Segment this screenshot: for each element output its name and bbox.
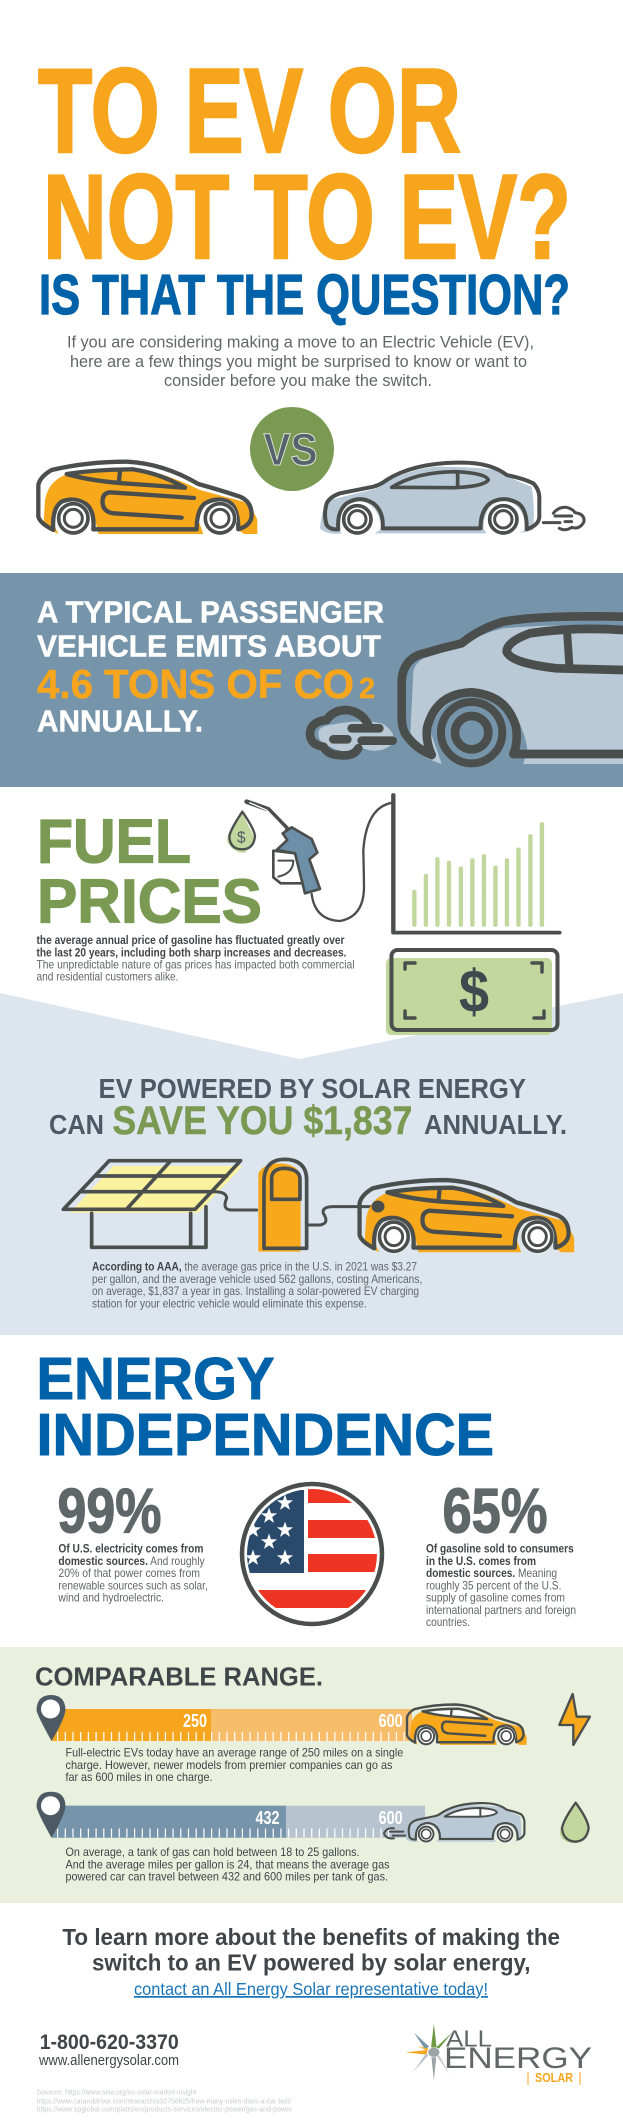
sources: Sources: https://www.seia.org/us-solar-market-insight <box>37 2089 197 2096</box>
heading: solar savings: ANNUALLY. <box>424 1109 567 1140</box>
intro text: consider before you make the switch. <box>164 372 432 390</box>
bar: electric range: 600 <box>379 1711 403 1731</box>
banner text: A TYPICAL PASSENGER <box>37 595 384 630</box>
logo: All Energy Solar: ALL <box>446 2026 492 2052</box>
heading: comparable range: COMPARABLE RANGE. <box>35 1662 323 1692</box>
contact details <box>38 2031 179 2069</box>
electric range text <box>66 1746 404 1784</box>
icon: dollar bill <box>386 950 558 1035</box>
banner text: VEHICLE EMITS ABOUT <box>37 629 381 664</box>
contact details: 1-800-620-3370 <box>40 2031 179 2054</box>
solar savings text: According to AAA, the average gas price in the U.S. in 2021 was $3.27 <box>92 1261 417 1274</box>
stat: 99 percent: wind and hydroelectric. <box>58 1592 164 1605</box>
title <box>38 44 571 327</box>
banner text <box>37 595 384 739</box>
stat: 65 percent: Of gasoline sold to consumers <box>426 1543 574 1556</box>
stat: 65 percent: supply of gasoline comes from <box>426 1592 565 1605</box>
heading: energy independence: INDEPENDENCE <box>36 1402 494 1468</box>
bar: gas range: 600 <box>379 1808 403 1828</box>
heading: solar savings <box>49 1073 567 1143</box>
solar savings text: per gallon, and the average vehicle used 562 gallons, costing Americans, <box>92 1273 422 1286</box>
heading: energy independence: ENERGY <box>36 1346 274 1412</box>
bar: electric range <box>36 1695 412 1741</box>
call to action: switch to an EV powered by solar energy, <box>92 1950 530 1976</box>
title: TO EV OR <box>38 44 461 178</box>
intro text <box>67 334 534 390</box>
icon: fuel drop <box>560 1803 589 1843</box>
heading: solar savings: CAN <box>49 1109 104 1140</box>
stat: 65 percent: countries. <box>426 1616 470 1629</box>
stat: 99 percent: Of U.S. electricity comes from <box>58 1543 203 1556</box>
fuel prices text: The unpredictable nature of gas prices has impacted both commercial <box>36 959 354 972</box>
solar savings text: station for your electric vehicle would eliminate this expense. <box>92 1297 367 1310</box>
heading: solar savings: SAVE YOU $1,837 <box>112 1099 412 1143</box>
icon: fuel nozzle, drop and hose <box>227 802 393 921</box>
bar: gas range: 432 <box>256 1808 280 1828</box>
call to action <box>62 1924 560 1999</box>
fuel prices text: the average annual price of gasoline has fluctuated greatly over <box>36 934 345 947</box>
icon: lightning bolt <box>559 1694 590 1745</box>
solar savings text: on average, $1,837 a year in gas. Installing a solar-powered EV charging <box>92 1285 419 1298</box>
stat: 65 percent <box>426 1477 576 1629</box>
panel: solar savings background <box>0 993 623 1335</box>
icon: solar panel, charger and car <box>63 1159 574 1254</box>
bar: gas range <box>36 1792 425 1838</box>
heading: fuel prices: FUEL <box>37 808 191 877</box>
stat: 99 percent: domestic sources. And roughly <box>58 1555 205 1568</box>
icon: US flag circle <box>240 1484 390 1624</box>
intro text: If you are considering making a move to an Electric Vehicle (EV), <box>67 334 534 352</box>
icon: dollar bill: $ <box>459 958 489 1025</box>
fuel prices text: the last 20 years, including both sharp increases and decreases. <box>36 947 346 960</box>
call to action: To learn more about the benefits of making the <box>62 1924 560 1950</box>
icon: electric car <box>38 462 257 535</box>
fuel prices text <box>36 934 354 984</box>
fuel prices text: and residential customers alike. <box>36 971 178 984</box>
gas range text: And the average miles per gallon is 24, that means the average gas <box>66 1857 390 1871</box>
gas range text <box>66 1845 390 1883</box>
panel: comparable range <box>0 1647 623 1903</box>
heading: energy independence <box>36 1346 494 1468</box>
stat: 99 percent: renewable sources such as solar, <box>58 1579 208 1592</box>
intro text: here are a few things you might be surprised to know or want to <box>70 353 527 371</box>
logo: All Energy Solar: ENERGY <box>444 2042 592 2075</box>
banner text: 2 <box>359 673 375 705</box>
stat: 65 percent: domestic sources. Meaning <box>426 1567 557 1580</box>
electric range text: far as 600 miles in one charge. <box>66 1770 212 1784</box>
stat: 99 percent: 20% of that power comes from <box>58 1567 200 1580</box>
banner text: ANNUALLY. <box>37 704 203 739</box>
heading: solar savings: EV POWERED BY SOLAR ENERGY <box>98 1073 526 1104</box>
logo: All Energy Solar: SOLAR <box>535 2070 574 2085</box>
VS badge: VS <box>264 424 318 475</box>
stat: 65 percent: international partners and foreign <box>426 1604 576 1617</box>
panel: CO2 banner <box>0 573 623 787</box>
logo: All Energy Solar <box>405 2024 592 2085</box>
electric range text: charge. However, newer models from premier companies can go as <box>66 1758 393 1772</box>
heading: fuel prices: PRICES <box>37 868 262 937</box>
icon: fuel nozzle, drop and hose: $ <box>237 829 246 846</box>
car charging <box>360 1180 574 1254</box>
sources: https://www.caranddriver.com/research/a32758625/how-many-miles-does-a-car-last/ <box>37 2098 291 2105</box>
VS badge <box>250 407 334 491</box>
bar: electric range: 250 <box>183 1711 207 1731</box>
stat: 99 percent: 99% <box>58 1477 162 1547</box>
icon: large gas car and exhaust <box>310 616 623 764</box>
icon: gas car small <box>406 1803 524 1843</box>
stat: 65 percent: roughly 35 percent of the U.S. <box>426 1579 561 1592</box>
gas range text: powered car can travel between 432 and 600 miles per tank of gas. <box>66 1869 388 1883</box>
gas range text: On average, a tank of gas can hold between 18 to 25 gallons. <box>66 1845 360 1859</box>
heading: fuel prices <box>37 808 262 937</box>
icon: gas car with exhaust <box>320 463 584 536</box>
electric range text: Full-electric EVs today have an average range of 250 miles on a single <box>66 1746 404 1760</box>
sources <box>37 2089 293 2114</box>
icon: electric car small <box>407 1704 527 1746</box>
banner text: 4.6 TONS OF CO <box>37 661 354 707</box>
solar savings text <box>92 1261 422 1310</box>
contact details: www.allenergysolar.com <box>38 2052 179 2069</box>
stat: 99 percent <box>58 1477 208 1605</box>
stat: 65 percent: in the U.S. comes from <box>426 1555 536 1568</box>
sources: https://www.spglobal.com/platts/en/products-services/electric-power/gas-and-power <box>37 2107 293 2114</box>
icon: exhaust small <box>384 1828 405 1838</box>
call to action: contact an All Energy Solar representative today! <box>134 1979 488 1999</box>
chart: fuel price bars <box>393 795 559 933</box>
stat: 65 percent: 65% <box>442 1477 548 1547</box>
